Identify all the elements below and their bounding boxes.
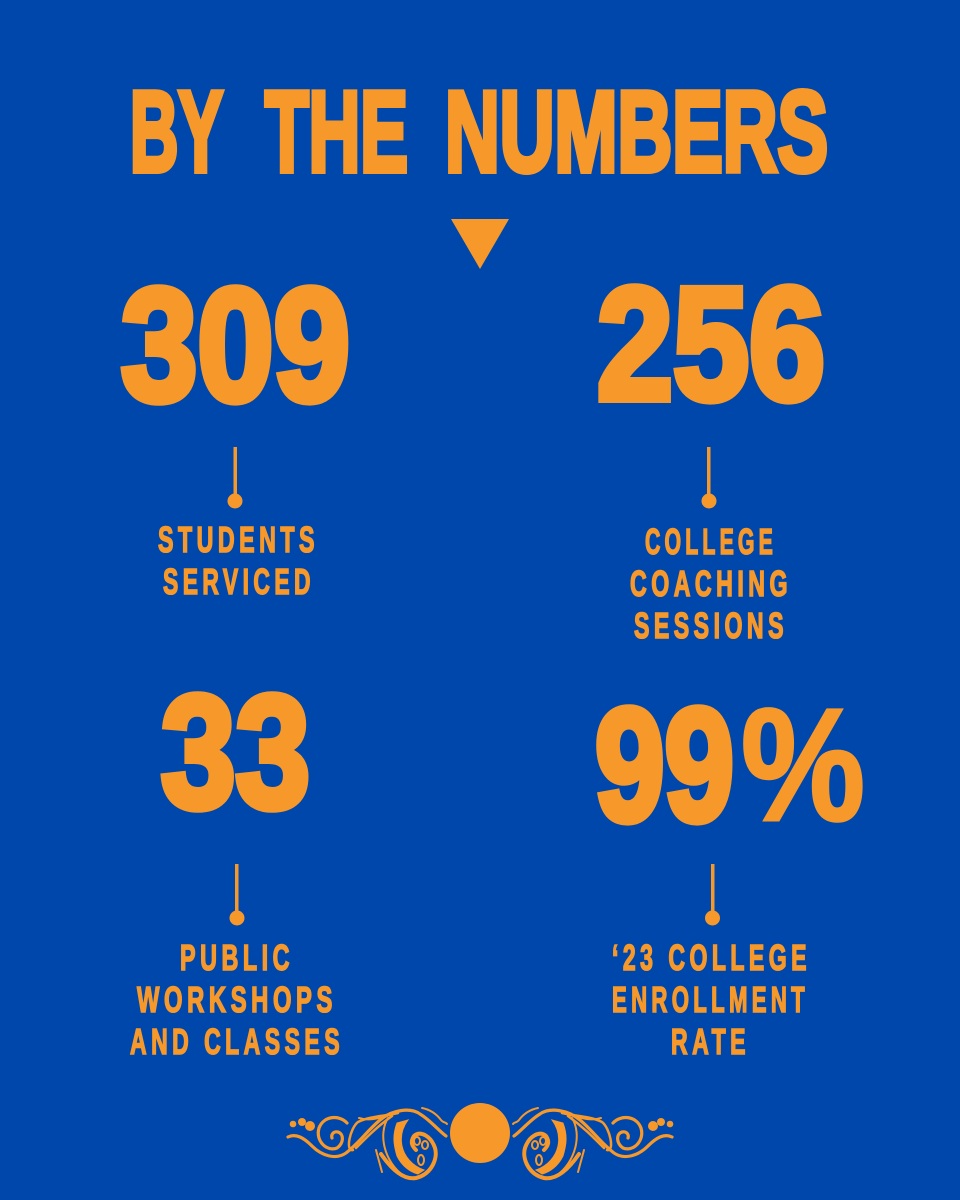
flourish right [513, 1108, 673, 1178]
stat: 99% enrollment [595, 675, 865, 1062]
label: PUBLIC [180, 937, 294, 978]
connector [228, 447, 242, 508]
flourish left [288, 1108, 447, 1178]
connector [705, 864, 720, 926]
label [612, 937, 811, 1062]
label: ‘23 COLLEGE [612, 937, 811, 978]
label: ENROLLMENT [612, 979, 809, 1020]
ornament circle [450, 1103, 510, 1163]
label: SESSIONS [634, 605, 788, 646]
stat: 33 workshops [130, 662, 344, 1062]
title [130, 69, 828, 196]
label [630, 521, 792, 646]
number 99% [595, 675, 865, 854]
label: STUDENTS [158, 519, 319, 560]
connector [702, 447, 716, 508]
number 99%: % [741, 675, 865, 854]
stat: 309 students serviced [121, 255, 350, 602]
label: COACHING [630, 563, 792, 604]
arrow: down triangle [451, 219, 509, 269]
title: BY [130, 69, 223, 196]
label: RATE [671, 1021, 750, 1062]
label [158, 519, 319, 602]
connector [230, 864, 244, 926]
number 99%: 99 [595, 675, 734, 854]
label: AND CLASSES [130, 1021, 344, 1062]
label [130, 937, 344, 1062]
number 309: 309 [121, 255, 350, 434]
title: THE [265, 69, 408, 196]
label: COLLEGE [645, 521, 777, 562]
number 256: 256 [597, 254, 825, 433]
ornament: flourish with circle [288, 1103, 673, 1178]
label: WORKSHOPS [137, 979, 337, 1020]
stat: 256 coaching sessions [597, 254, 825, 646]
number 33: 33 [161, 662, 310, 841]
label: SERVICED [163, 561, 315, 602]
